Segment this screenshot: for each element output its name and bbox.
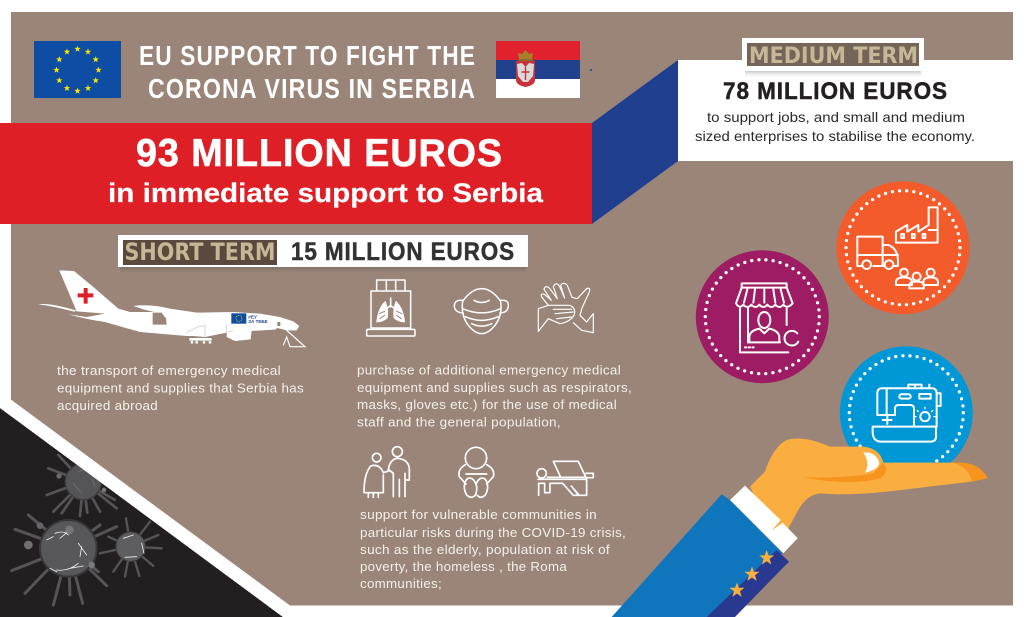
icon: airplane <box>38 270 305 347</box>
landing gear <box>189 338 212 341</box>
icon: elderly couple <box>364 447 409 497</box>
blue connector <box>592 60 678 224</box>
description: sized enterprises to stabilise the economy. <box>695 128 975 144</box>
icon: face mask <box>454 289 508 334</box>
panel: medium term <box>592 38 1013 224</box>
red banner: in immediate support to Serbia <box>108 178 544 208</box>
text: purchase: purchase of additional emergency medical <box>357 362 621 378</box>
icon: sewing machine <box>873 385 941 442</box>
panel: short term heading: 15 MILLION EUROS <box>291 238 515 266</box>
text: vulnerable communities <box>360 507 626 591</box>
panel: short term heading <box>118 235 528 273</box>
icon: EU flag <box>34 41 121 98</box>
plane slogan: ЗА ТЕБЕ <box>248 319 268 324</box>
virus: large <box>12 515 117 605</box>
icon: shop <box>736 283 798 352</box>
circle: shop <box>696 250 829 383</box>
sleeve <box>612 494 783 617</box>
text: purchase: masks, gloves etc.) for the use of medical <box>357 397 617 412</box>
icon: truck, factory and people <box>857 207 938 288</box>
amount: 78 MILLION EUROS <box>723 78 948 105</box>
red banner: 93 MILLION EUROS <box>136 132 503 175</box>
cuff <box>730 486 798 553</box>
stars <box>730 550 774 597</box>
black corner with virus illustration <box>0 400 300 617</box>
fingertip shade <box>953 463 988 482</box>
virus: medium <box>100 518 162 577</box>
panel: short term heading: SHORT TERM <box>124 238 276 266</box>
plane flag <box>231 313 246 324</box>
icon: homeless person <box>459 447 494 497</box>
virus: top <box>47 455 117 516</box>
text: vulnerable communities: support for vulnerable communities in <box>360 507 597 522</box>
white diagonal band <box>0 400 300 617</box>
white box <box>678 60 1013 161</box>
sleeve stripe <box>707 550 789 617</box>
hand <box>750 438 988 532</box>
text: vulnerable communities: such as the elderly, population at risk of <box>360 542 610 557</box>
title: EU SUPPORT TO FIGHT THE <box>139 40 476 71</box>
title: CORONA VIRUS IN SERBIA <box>148 73 476 104</box>
icon: washing hands <box>538 283 593 333</box>
boarding stairs <box>283 330 305 347</box>
icon: bench <box>537 461 593 495</box>
plane slogan <box>248 314 268 324</box>
text: vulnerable communities: communities; <box>360 576 442 591</box>
circle: logistics <box>836 181 970 314</box>
description: to support jobs, and small and medium <box>707 109 965 125</box>
badge shadow <box>745 71 921 79</box>
illustration: hand and sleeve <box>612 438 988 617</box>
circle: sewing machine <box>840 346 973 479</box>
thumbnail <box>863 453 879 473</box>
plane slogan: #ЕУ <box>248 314 257 319</box>
title <box>139 40 476 104</box>
text: transport <box>57 363 304 413</box>
text: vulnerable communities: poverty, the homeless , the Roma <box>360 559 567 574</box>
icon: Serbian flag <box>496 41 580 98</box>
thumb shade <box>803 463 886 482</box>
small blue dot <box>590 69 592 71</box>
red cross <box>78 288 93 304</box>
text: transport: acquired abroad <box>57 398 158 413</box>
text: purchase: staff and the general population, <box>357 414 561 430</box>
text: vulnerable communities: particular risks during the COVID-19 crisis, <box>360 525 626 540</box>
text: purchase: equipment and supplies such as respirators, <box>357 380 632 395</box>
icon: ventilator <box>367 280 415 336</box>
description <box>695 109 975 144</box>
badge: MEDIUM TERM <box>749 44 918 69</box>
text: purchase <box>357 362 632 430</box>
text: transport: equipment and supplies that Serbia has <box>57 380 304 396</box>
text: transport: the transport of emergency medical <box>57 363 281 378</box>
red banner <box>0 123 592 224</box>
